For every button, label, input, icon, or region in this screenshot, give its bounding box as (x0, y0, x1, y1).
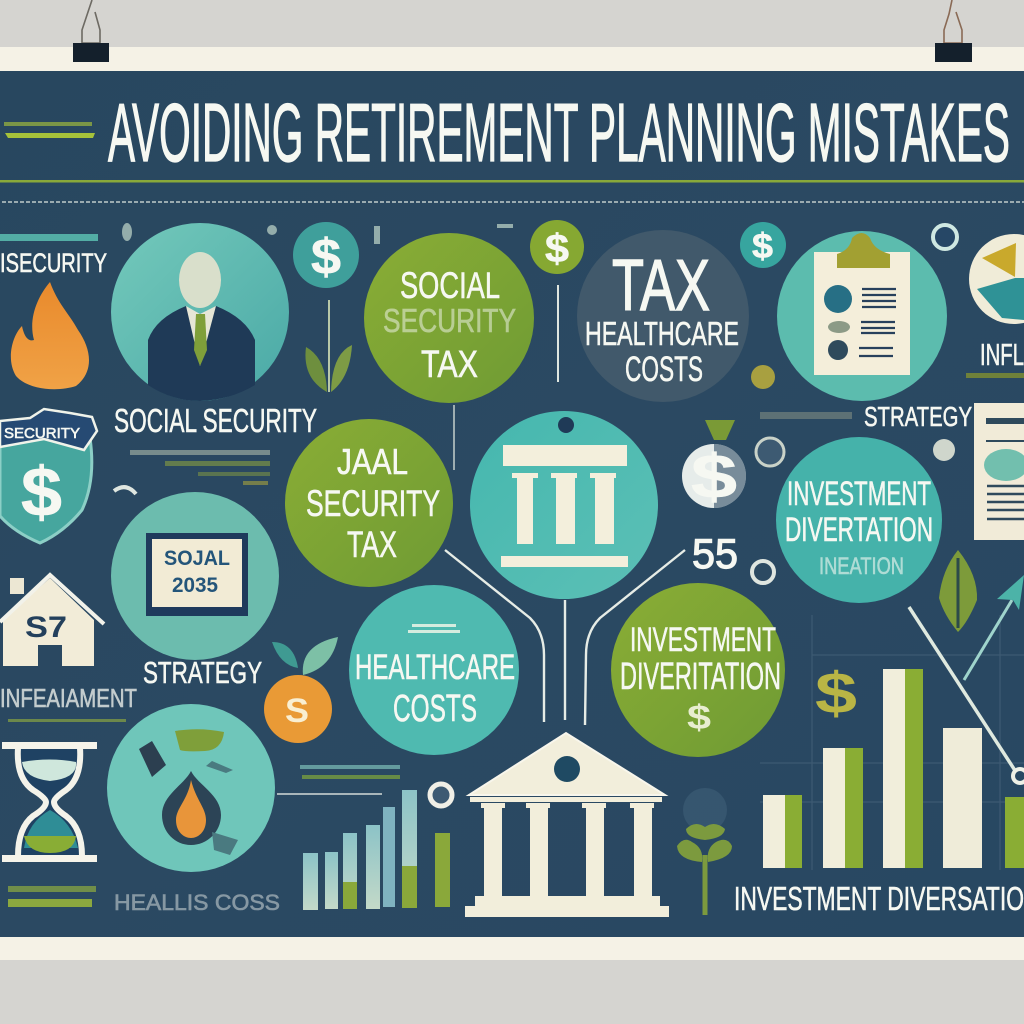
panel: tax healthcare costs circle (577, 230, 749, 402)
icon: security shield: $ (21, 453, 62, 531)
panel: healthcare costs circle: COSTS (393, 688, 477, 730)
icon: bank building (465, 733, 669, 917)
left security label: ISECURITY (0, 248, 107, 278)
arrow: down trend (909, 607, 1024, 783)
icon: security shield (0, 409, 97, 543)
panel: tax healthcare costs circle: TAX (612, 246, 710, 326)
icon: dollar drop (682, 420, 746, 512)
panel: teal bank circle (470, 411, 658, 599)
icon: dollar coin (293, 222, 359, 288)
panel: green circle security tax (285, 419, 453, 587)
icon: green plant (677, 788, 732, 915)
left security label (0, 234, 107, 278)
panel: healthcare costs circle (349, 585, 519, 755)
panel: investment teal circle: INVESTMENT (787, 475, 931, 513)
icon: pie chart (969, 234, 1024, 324)
icon: bar chart ring (430, 784, 452, 806)
panel: droplet circle (107, 704, 275, 872)
text: social security: SOCIAL SECURITY (114, 402, 317, 439)
small marks: top row (122, 223, 513, 244)
panel: teal person circle (111, 223, 289, 401)
text: faded healthcare costs: HEALLIS COSS (114, 890, 280, 915)
icon: small ring left (756, 438, 784, 466)
arrow: up trend (964, 575, 1024, 680)
connector (557, 285, 559, 382)
panel: green circle social security tax: SECURITY (383, 302, 516, 339)
bar chart: left (277, 765, 450, 910)
panel: screen circle strategy: 2035 (172, 574, 218, 597)
panel: tax healthcare costs circle: COSTS (625, 350, 703, 389)
icon: sprout (305, 300, 352, 392)
blurred note: under social security (114, 450, 270, 494)
panel: investment teal circle (776, 437, 942, 603)
panel: clipboard circle (777, 231, 947, 401)
icon: small green dollar: $ (545, 227, 569, 271)
decorative green dashes: title left (4, 122, 95, 138)
icon: small green dollar (530, 220, 584, 274)
panel: investment green circle: $ (687, 699, 711, 737)
icon: ring (933, 225, 957, 249)
panel: investment green circle: INVESTMENT (630, 621, 776, 659)
icon: leaf (939, 550, 977, 632)
icon: small ring (752, 561, 774, 583)
text: 55: 55 (692, 530, 738, 577)
document card (974, 403, 1024, 540)
text: strategy right: STRATEGY (864, 401, 972, 432)
connector (453, 405, 455, 470)
small legend marks below hourglass (8, 886, 96, 907)
panel: green circle security tax: TAX (347, 524, 397, 565)
text: inflation fragment (966, 337, 1024, 378)
icon: flame (11, 282, 89, 389)
panel: investment green circle (611, 583, 785, 757)
bar chart: right (760, 615, 1024, 870)
icon: house: S7 (25, 611, 67, 644)
icon: teal dollar (740, 222, 786, 268)
text: strategy: STRATEGY (143, 655, 262, 690)
panel: healthcare costs circle: HEALTHCARE (355, 648, 515, 687)
panel: investment teal circle: INEATION (819, 553, 904, 580)
panel: screen circle strategy (111, 492, 279, 660)
panel: investment teal circle: DIVERTATION (785, 511, 933, 549)
icon: orange fruit with leaves (264, 637, 338, 743)
icon: dollar drop: $ (691, 443, 737, 512)
panel: investment green circle: DIVERITATION (620, 656, 781, 698)
panel: green circle social security tax: SOCIAL (400, 265, 500, 306)
blurred note: left of strategy (760, 412, 852, 419)
panel: green circle social security tax: TAX (421, 344, 478, 386)
right binder clip (935, 0, 972, 62)
icon: dollar coin: $ (311, 229, 341, 285)
panel: tax healthcare costs circle: HEALTHCARE (585, 315, 739, 352)
left binder clip (73, 0, 109, 62)
house label (0, 683, 137, 722)
house label: INFEAIAMENT (0, 683, 137, 713)
icon: teal dollar: $ (752, 227, 773, 266)
panel: green circle social security tax (364, 233, 534, 403)
title rule (0, 180, 1024, 182)
panel: green circle security tax: JAAL (337, 441, 408, 482)
icon: security shield: SECURITY (4, 425, 80, 442)
icon: gold dollar: $ (815, 661, 857, 726)
icon: house (0, 575, 104, 666)
panel: green circle security tax: SECURITY (306, 483, 440, 524)
connector lines to bank (445, 550, 685, 725)
icon: orange fruit with leaves: S (285, 692, 309, 730)
icon: small mask (933, 439, 955, 461)
dotted rule (2, 201, 1024, 203)
icon: hourglass (2, 742, 97, 862)
panel: screen circle strategy: SOJAL (164, 547, 230, 570)
icon: small yellow badge (751, 365, 775, 389)
